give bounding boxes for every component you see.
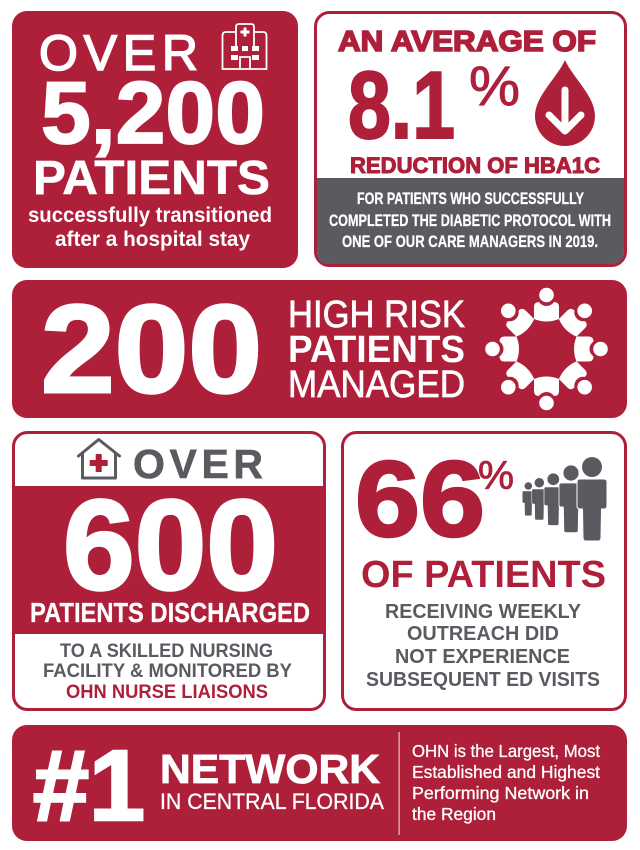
text: to a skilled nursing: TO A SKILLED NURSING: [60, 640, 273, 662]
text: outreach did: OUTREACH DID: [407, 623, 559, 645]
heading: reduction of HbA1c: REDUCTION OF HBA1C: [350, 153, 600, 178]
percent sign: %: [478, 454, 514, 498]
panel: over 600 patients discharged: [13, 432, 325, 710]
icon: people in a circle: [485, 288, 608, 410]
text: in central florida: IN CENTRAL FLORIDA: [160, 789, 384, 814]
big number: 8.1: 8.1: [348, 52, 455, 159]
icon: hospital: [222, 24, 266, 69]
text: OHN description: Performing Network in: [412, 783, 589, 803]
panel: number one network: [12, 725, 627, 842]
big number: 200: 200: [41, 280, 262, 419]
heading: an average of: AN AVERAGE OF: [338, 26, 596, 58]
heading: over: OVER: [133, 441, 263, 487]
text: patients: PATIENTS: [288, 329, 465, 371]
text: subsequent ED visits: SUBSEQUENT ED VISITS: [366, 669, 600, 691]
icon: line of people: [522, 457, 607, 541]
icon: blood drop with down arrow: [535, 60, 595, 146]
heading: of patients: OF PATIENTS: [361, 554, 606, 596]
heading: patients discharged: PATIENTS DISCHARGED: [30, 597, 310, 628]
percent sign: %: [469, 54, 520, 117]
text: not experience: NOT EXPERIENCE: [395, 646, 570, 668]
text: OHN description: the Region: [412, 804, 496, 824]
text: successfully transitioned: successfully transitioned: [28, 204, 272, 227]
heading: patients: PATIENTS: [33, 152, 270, 205]
panel: 66% of patients: [342, 432, 626, 710]
big number: 5,200: 5,200: [41, 63, 265, 162]
icon: house with cross: [78, 440, 120, 478]
big number: 600: 600: [63, 474, 278, 617]
heading: network: NETWORK: [160, 746, 380, 792]
text: receiving weekly: RECEIVING WEEKLY: [385, 601, 582, 623]
text: OHN description: [412, 741, 600, 824]
text: OHN nurse liaisons: OHN NURSE LIAISONS: [66, 681, 268, 703]
text: OHN description: Established and Highest: [412, 762, 600, 782]
big number: #1: #1: [33, 730, 145, 842]
text: high risk: HIGH RISK: [288, 294, 465, 336]
panel: over 5,200 patients: [12, 11, 298, 268]
heading: over: OVER: [39, 25, 198, 81]
panel: 200 high risk patients: [12, 280, 627, 419]
big number: 66: 66: [355, 438, 485, 559]
panel: 8.1% reduction of HbA1c: [316, 12, 626, 266]
text: OHN description: OHN is the Largest, Most: [412, 741, 600, 761]
divider: [398, 732, 400, 835]
text: managed: MANAGED: [288, 364, 465, 406]
text: after a hospital stay: after a hospital stay: [55, 228, 250, 251]
text: facility and monitored by: FACILITY & MONITORED BY: [43, 660, 292, 682]
